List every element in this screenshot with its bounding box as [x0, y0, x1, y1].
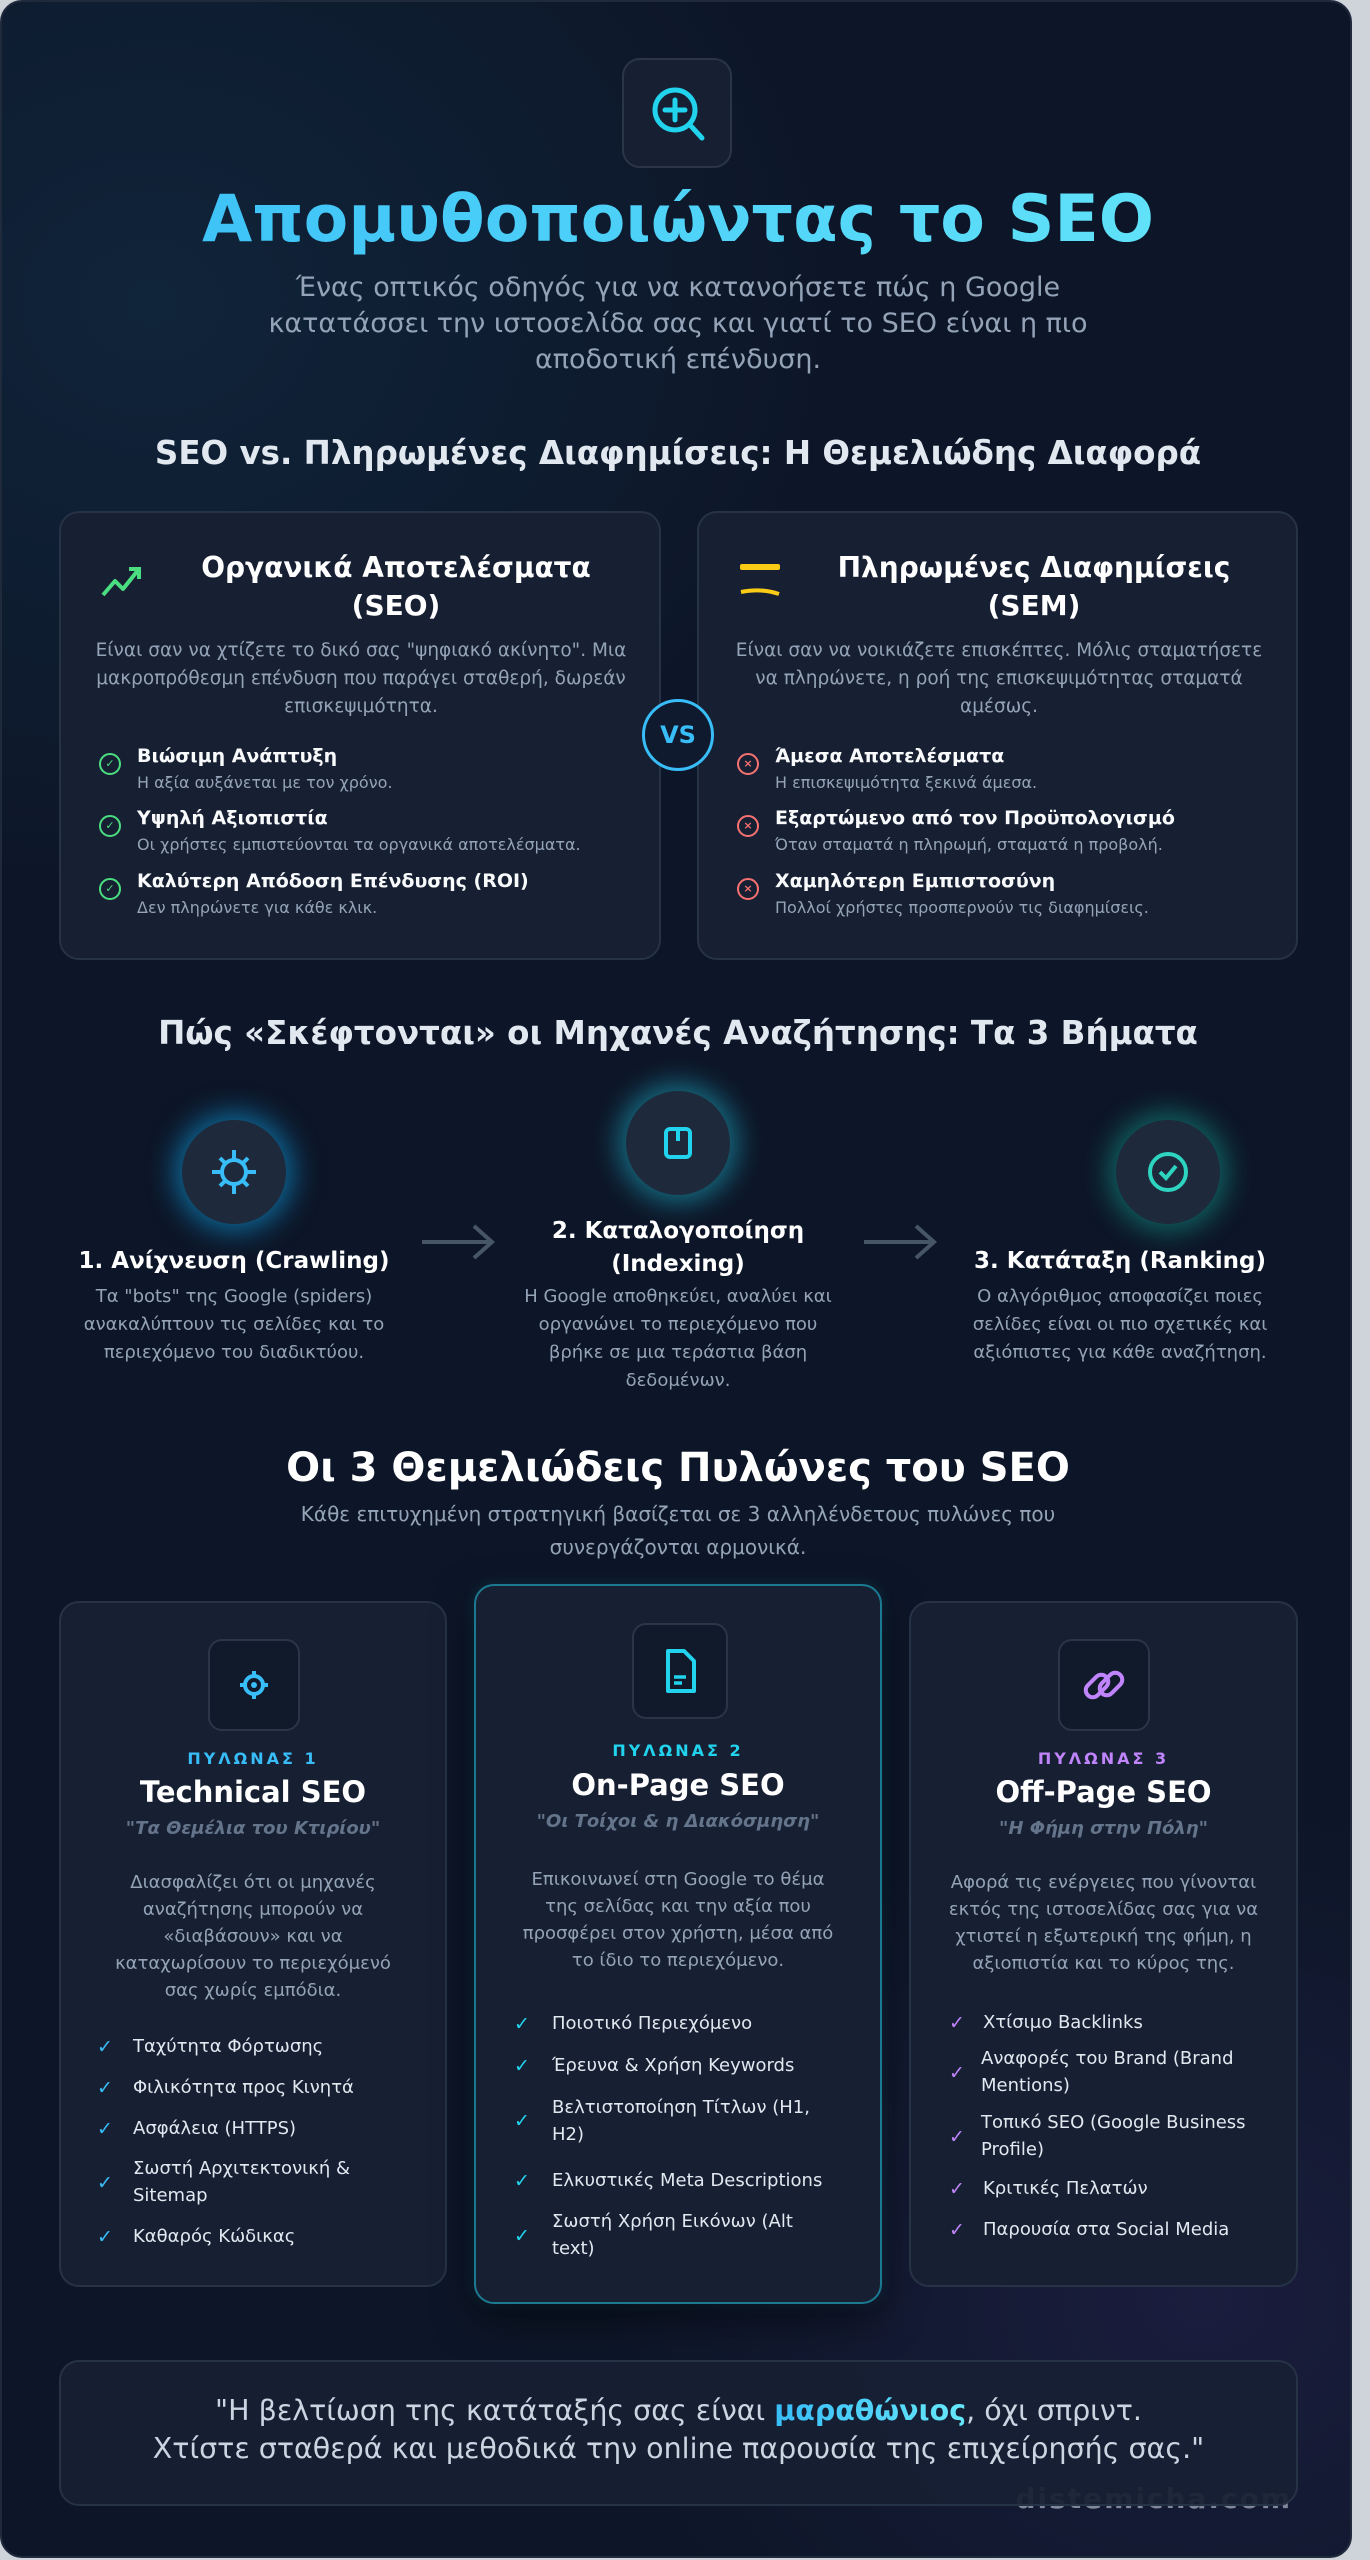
heading: 3 pillars: Οι 3 Θεμελιώδεις Πυλώνες του SEO [286, 1445, 1070, 1491]
checklist: ✓ [949, 2219, 965, 2241]
list: benefits: ✓ [105, 819, 115, 832]
checklist: Παρουσία στα Social Media [983, 2219, 1229, 2240]
checklist: Ποιοτικό Περιεχόμενο [552, 2013, 752, 2034]
callout: closing quote: Χτίστε σταθερά και μεθοδικά την online παρουσία της επιχείρησής σας." [153, 2432, 1204, 2465]
step 3: ranking: αξιόπιστες για κάθε αναζήτηση. [973, 1342, 1267, 1363]
panel: off-page SEO: ΠΥΛΩΝΑΣ 3 [1038, 1749, 1169, 1768]
checklist: Κριτικές Πελατών [983, 2178, 1148, 2199]
title [2, 177, 1354, 263]
step 1: crawling: ανακαλύπτουν τις σελίδες και το [84, 1314, 384, 1335]
arrow [864, 1224, 937, 1260]
step 2: indexing: οργανώνει το περιεχόμενο που [539, 1314, 817, 1335]
panel: off-page SEO: αξιοπιστία και το κύρος της. [972, 1953, 1234, 1974]
arrow [422, 1224, 495, 1260]
list: drawbacks: Η επισκεψιμότητα ξεκινά άμεσα. [775, 773, 1037, 792]
checklist: ✓ [97, 2036, 113, 2058]
step 2: indexing [524, 1068, 832, 1391]
step 2: indexing: 2. Καταλογοποίηση [552, 1218, 804, 1244]
checklist: Ασφάλεια (HTTPS) [133, 2118, 296, 2139]
title [201, 551, 591, 622]
step 2: indexing: δεδομένων. [626, 1370, 730, 1391]
panel: off-page SEO: Off-Page SEO [995, 1775, 1212, 1809]
checklist [514, 2013, 822, 2259]
checklist: Χτίσιμο Backlinks [983, 2012, 1143, 2033]
checklist: ✓ [514, 2170, 530, 2192]
title: Πληρωμένες Διαφημίσεις [838, 551, 1230, 584]
description: επισκεψιμότητα. [284, 696, 438, 717]
description: Είναι σαν να χτίζετε το δικό σας "ψηφιακό ακίνητο". Μια [96, 640, 626, 661]
step 3: ranking [973, 1099, 1267, 1363]
subtitle: κατατάσσει την ιστοσελίδα σας και γιατί το SEO είναι η πιο [268, 308, 1088, 339]
heading: 3 steps: Πώς «Σκέφτονται» οι Μηχανές Αναζήτησης: Τα 3 Βήματα [158, 1014, 1198, 1052]
step 1: crawling: Τα "bots" της Google (spiders) [96, 1286, 372, 1307]
list: benefits: Βιώσιμη Ανάπτυξη [137, 745, 337, 767]
step 3: ranking: 3. Κατάταξη (Ranking) [974, 1248, 1266, 1274]
badge: VS [642, 699, 714, 771]
panel: off-page SEO: Αφορά τις ενέργειες που γίνονται [951, 1872, 1256, 1893]
checklist: Τοπικό SEO (Google Business [981, 2112, 1246, 2133]
panel: paid SEM [697, 511, 1298, 960]
description: μακροπρόθεσμη επένδυση που παράγει σταθερή, δωρεάν [96, 668, 626, 689]
icon: gear [208, 1639, 300, 1731]
icon: link [1058, 1639, 1150, 1731]
panel: technical SEO: "Τα Θεμέλια του Κτιρίου" [126, 1818, 380, 1839]
panel: technical SEO: Technical SEO [140, 1775, 366, 1809]
checklist: ✓ [97, 2077, 113, 2099]
checklist: ✓ [514, 2055, 530, 2077]
checklist: text) [552, 2238, 595, 2259]
list: drawbacks: Εξαρτώμενο από τον Προϋπολογισμό [775, 807, 1175, 829]
panel: technical SEO: αναζήτησης μπορούν να [143, 1899, 363, 1920]
panel: on-page SEO (highlighted): το ίδιο το περιεχόμενο. [572, 1950, 784, 1971]
description: να πληρώνετε, η ροή της επισκεψιμότητας σταματά [755, 668, 1243, 689]
list: drawbacks: Χαμηλότερη Εμπιστοσύνη [775, 870, 1055, 892]
checklist: ✓ [949, 2178, 965, 2200]
description: αμέσως. [960, 696, 1038, 717]
panel: on-page SEO (highlighted): Επικοινωνεί στη Google το θέμα [532, 1869, 824, 1890]
checklist: Βελτιστοποίηση Τίτλων (H1, [552, 2097, 810, 2118]
list: benefits: ✓ [105, 757, 115, 770]
icon: paid [740, 564, 780, 596]
icon: trend up [102, 567, 141, 596]
checklist: ✓ [949, 2012, 965, 2034]
list: benefits: Υψηλή Αξιοπιστία [137, 807, 328, 829]
panel: off-page SEO: εκτός της ιστοσελίδας σας για να [949, 1899, 1258, 1920]
panel: technical SEO: σας χωρίς εμπόδια. [165, 1980, 341, 2001]
checklist [97, 2036, 354, 2248]
step 1: crawling [79, 1096, 389, 1363]
checklist: ✓ [514, 2013, 530, 2035]
panel: on-page SEO (highlighted): της σελίδας και την αξία που [545, 1896, 811, 1917]
pillars subtitle [301, 1502, 1055, 1559]
watermark: distemicha.com [1015, 2482, 1292, 2515]
checklist [949, 2012, 1246, 2241]
list: benefits: Η αξία αυξάνεται με τον χρόνο. [137, 773, 393, 792]
callout: closing quote: "Η βελτίωση της κατάταξής σας είναι μαραθώνιος, όχι σπριντ. [215, 2394, 1142, 2427]
checklist: ✓ [514, 2110, 530, 2132]
panel: on-page SEO (highlighted): "Οι Τοίχοι & η Διακόσμηση" [537, 1811, 819, 1832]
checklist: Profile) [981, 2139, 1044, 2160]
list: benefits: Οι χρήστες εμπιστεύονται τα οργανικά αποτελέσματα. [137, 835, 581, 854]
icon: magnifier [622, 58, 732, 168]
panel: technical SEO: Διασφαλίζει ότι οι μηχανές [130, 1872, 376, 1893]
panel: on-page SEO (highlighted): ΠΥΛΩΝΑΣ 2 [612, 1741, 744, 1760]
step 2: indexing: (Indexing) [611, 1251, 745, 1277]
list: benefits: Δεν πληρώνετε για κάθε κλικ. [137, 898, 377, 917]
panel: on-page SEO (highlighted): προσφέρει στον χρήστη, μέσα από [523, 1923, 833, 1944]
checklist: ✓ [97, 2118, 113, 2140]
title: Οργανικά Αποτελέσματα [201, 551, 591, 584]
checklist: Αναφορές του Brand (Brand [981, 2048, 1234, 2069]
checklist: Φιλικότητα προς Κινητά [133, 2077, 354, 2098]
title: (SEO) [352, 589, 440, 622]
checklist: ✓ [97, 2172, 113, 2194]
checklist: ✓ [514, 2225, 530, 2247]
list: drawbacks: Πολλοί χρήστες προσπερνούν τις διαφημίσεις. [775, 898, 1149, 917]
checklist: ✓ [97, 2226, 113, 2248]
icon: document [632, 1623, 728, 1719]
list: benefits: Καλύτερη Απόδοση Επένδυσης (ROI) [137, 870, 529, 892]
description [96, 640, 626, 717]
step 2: indexing: Η Google αποθηκεύει, αναλύει και [524, 1286, 832, 1307]
panel: off-page SEO: χτιστεί η εξωτερική της φήμη, η [955, 1926, 1252, 1947]
list: drawbacks: Όταν σταματά η πληρωμή, σταματά η προβολή. [775, 835, 1163, 854]
panel: technical SEO: καταχωρίσουν το περιεχόμενό [115, 1953, 391, 1974]
step 2: indexing: βρήκε σε μια τεράστια βάση [549, 1342, 807, 1363]
checklist: Σωστή Αρχιτεκτονική & [133, 2158, 350, 2179]
callout: closing quote [59, 2360, 1298, 2506]
panel: off-page SEO: "Η Φήμη στην Πόλη" [999, 1818, 1208, 1839]
panel: organic SEO [59, 511, 661, 960]
heading: SEO vs paid: SEO vs. Πληρωμένες Διαφημίσεις: Η Θεμελιώδης Διαφορά [155, 434, 1201, 472]
step 1: crawling: 1. Ανίχνευση (Crawling) [79, 1248, 389, 1274]
description: Είναι σαν να νοικιάζετε επισκέπτες. Μόλις σταματήσετε [736, 640, 1262, 661]
description [736, 640, 1262, 717]
list: drawbacks: × [743, 882, 753, 895]
list: drawbacks: × [743, 819, 753, 832]
title: (SEM) [988, 589, 1080, 622]
checklist: ✓ [949, 2062, 965, 2084]
pillars subtitle: συνεργάζονται αρμονικά. [550, 1535, 806, 1559]
subtitle: αποδοτική επένδυση. [535, 344, 821, 375]
list: drawbacks [737, 745, 1175, 917]
checklist: Καθαρός Κώδικας [133, 2226, 295, 2247]
checklist: Ελκυστικές Meta Descriptions [552, 2170, 822, 2191]
checklist: Sitemap [133, 2185, 208, 2206]
subtitle: Ένας οπτικός οδηγός για να κατανοήσετε πώς η Google [296, 272, 1060, 303]
badge: VS: VS [660, 721, 696, 749]
list: benefits: ✓ [105, 882, 115, 895]
checklist: Σωστή Χρήση Εικόνων (Alt [552, 2211, 793, 2232]
list: drawbacks: × [743, 757, 753, 770]
title: Απομυθοποιώντας το SEO [202, 182, 1154, 257]
panel: off-page SEO [909, 1601, 1298, 2287]
list: benefits [99, 745, 581, 917]
checklist: Mentions) [981, 2075, 1070, 2096]
step 1: crawling: περιεχόμενο του διαδικτύου. [104, 1342, 364, 1363]
panel: technical SEO [59, 1601, 447, 2287]
checklist: H2) [552, 2124, 584, 2145]
panel: on-page SEO (highlighted) [474, 1584, 882, 2304]
checklist: Έρευνα & Χρήση Keywords [552, 2055, 794, 2076]
step 3: ranking: σελίδες είναι οι πιο σχετικές και [973, 1314, 1267, 1335]
panel: technical SEO: ΠΥΛΩΝΑΣ 1 [187, 1749, 319, 1768]
subtitle [268, 272, 1088, 375]
panel: technical SEO: «διαβάσουν» και να [163, 1926, 343, 1947]
panel: on-page SEO (highlighted): On-Page SEO [571, 1768, 785, 1802]
pillars subtitle: Κάθε επιτυχημένη στρατηγική βασίζεται σε 3 αλληλένδετους πυλώνες που [301, 1502, 1055, 1526]
step 3: ranking: Ο αλγόριθμος αποφασίζει ποιες [977, 1286, 1263, 1307]
checklist: ✓ [949, 2126, 965, 2148]
list: drawbacks: Άμεσα Αποτελέσματα [775, 745, 1004, 767]
title [838, 551, 1230, 622]
checklist: Ταχύτητα Φόρτωσης [133, 2036, 323, 2057]
